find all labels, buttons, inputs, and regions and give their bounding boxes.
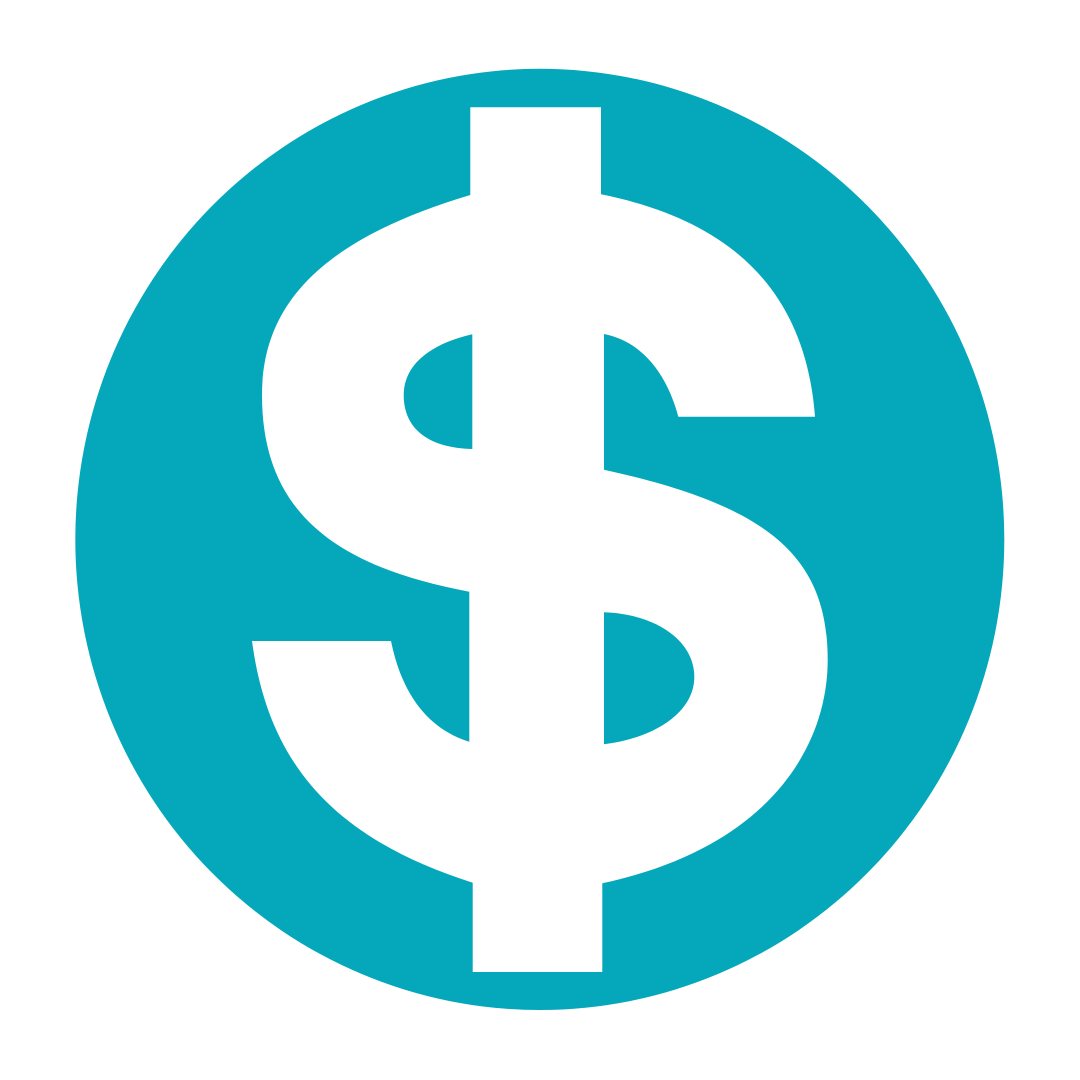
dollar sign body bbox=[252, 107, 828, 972]
lower counter of dollar sign bbox=[604, 612, 694, 744]
teal circle bbox=[75, 69, 1004, 1010]
upper counter of dollar sign bbox=[404, 334, 472, 449]
